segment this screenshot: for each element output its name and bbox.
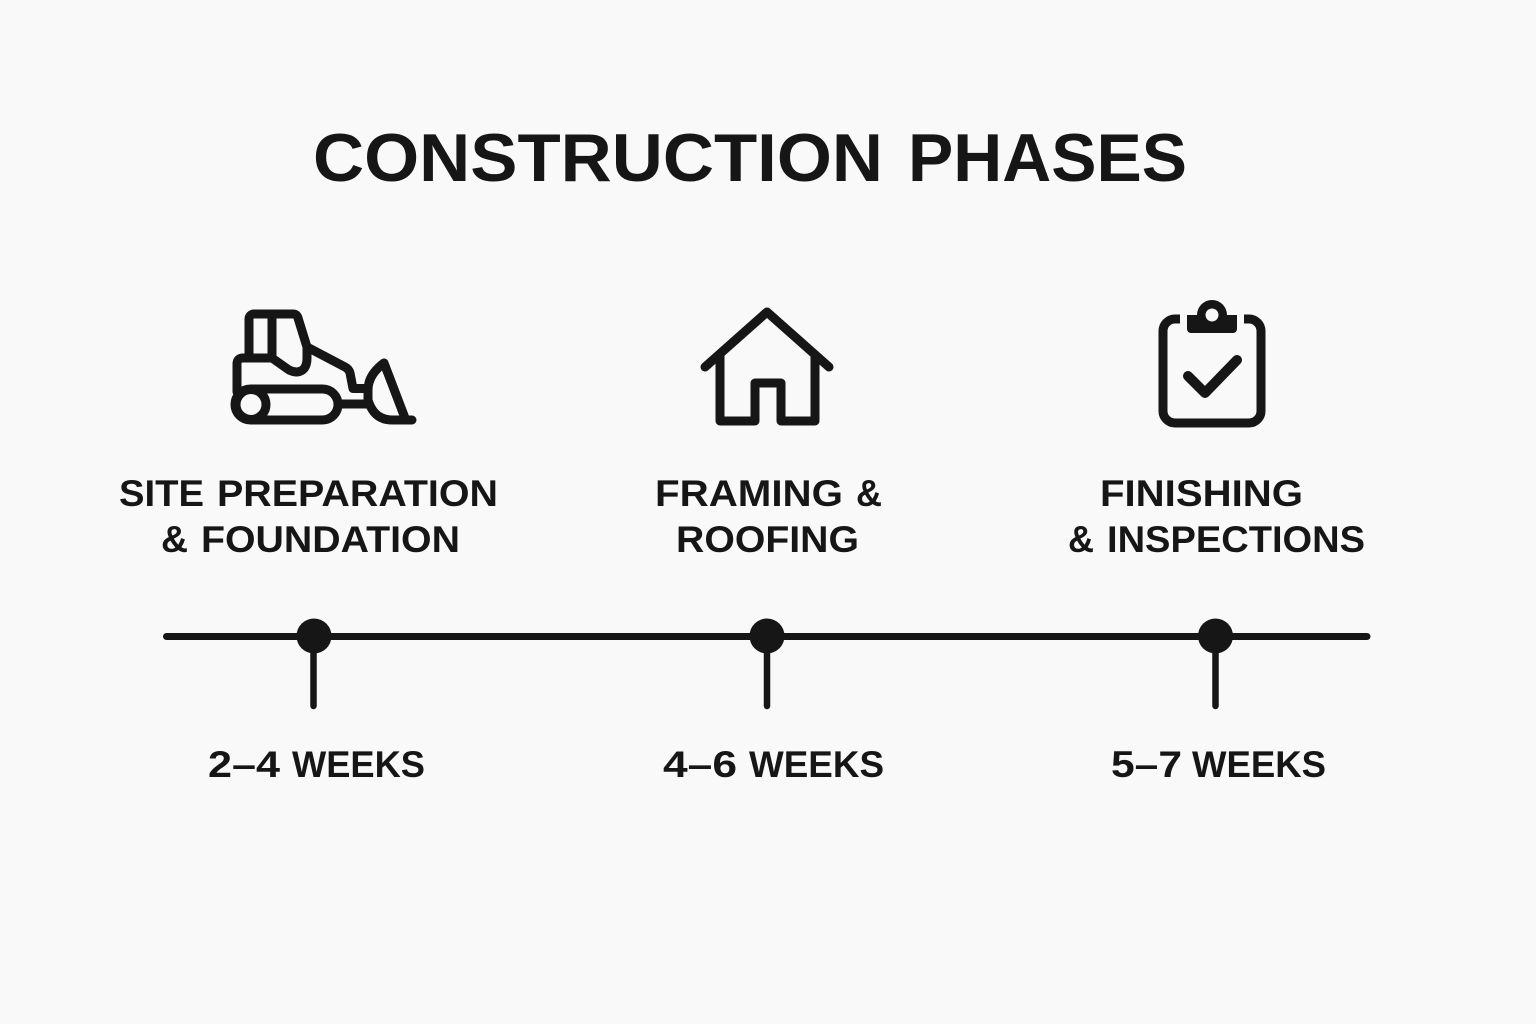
phase 1 label <box>119 473 498 560</box>
phase 3 label: FINISHING <box>1100 473 1303 514</box>
duration 1: 2–4 <box>208 744 280 785</box>
timeline <box>166 618 1367 706</box>
title: PHASES <box>908 120 1187 196</box>
duration 2: WEEKS <box>749 744 884 785</box>
duration 3 <box>1111 744 1326 785</box>
phase 3 label: & <box>1068 519 1094 560</box>
title <box>313 120 1187 196</box>
icon: house <box>705 312 829 421</box>
milestone 2 <box>750 618 784 706</box>
duration 2: 4–6 <box>663 744 737 785</box>
phase 1 label: & <box>161 519 188 560</box>
clipboard clip <box>1187 300 1237 333</box>
clipboard outline <box>1163 319 1261 423</box>
title: CONSTRUCTION <box>313 120 883 196</box>
checkmark <box>1188 360 1237 393</box>
phase 1 label: SITE <box>119 473 204 514</box>
duration 1 <box>208 744 425 785</box>
duration 3: 5–7 <box>1111 744 1182 785</box>
phase 3 label: INSPECTIONS <box>1107 519 1365 560</box>
phase 2 label: & <box>856 473 882 514</box>
milestone 3 <box>1198 618 1233 706</box>
icon: clipboard with checkmark <box>1163 300 1261 423</box>
phase 2 label: ROOFING <box>676 519 859 560</box>
phase 2 label: FRAMING <box>655 473 843 514</box>
phase 2 label <box>655 473 882 560</box>
milestone 1 <box>296 618 332 706</box>
timeline axis <box>166 633 1367 640</box>
phase 1 label: FOUNDATION <box>201 519 460 560</box>
duration 2 <box>663 744 884 785</box>
phase 3 label <box>1068 473 1365 560</box>
phase 1 label: PREPARATION <box>217 473 498 514</box>
duration 3: WEEKS <box>1192 744 1326 785</box>
icon: bulldozer <box>235 314 412 420</box>
duration 1: WEEKS <box>292 744 425 785</box>
